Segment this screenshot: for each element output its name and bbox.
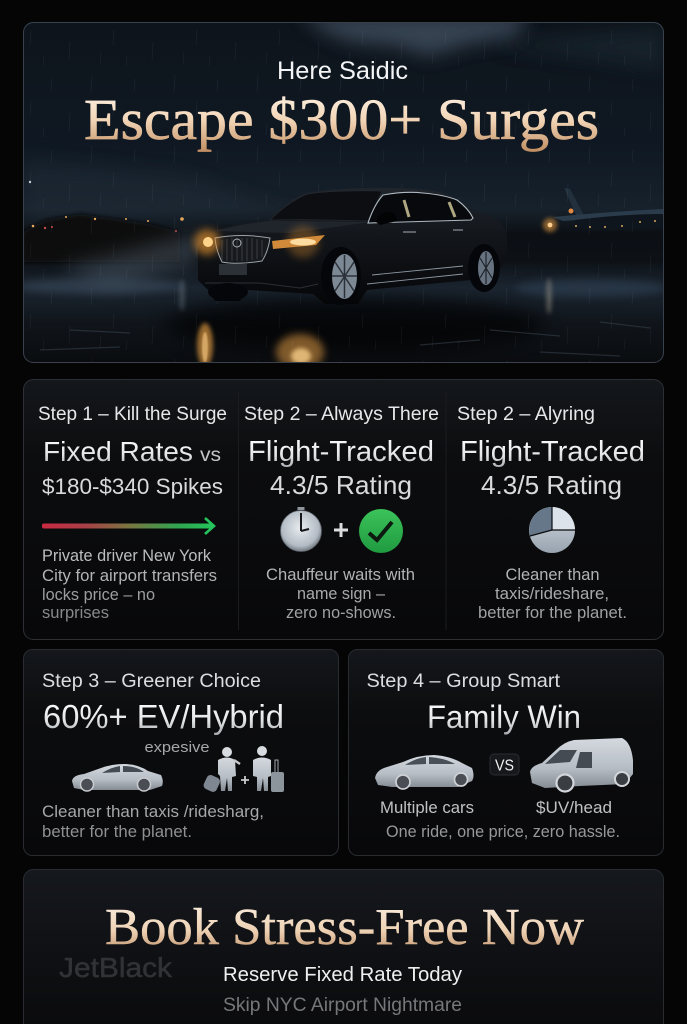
column: kill the surge: Private driver New York — [42, 547, 212, 565]
icon: van — [530, 738, 633, 792]
panel: step 3 — [24, 650, 338, 856]
plane — [543, 188, 663, 232]
label: per head: $UV/head — [536, 798, 612, 817]
step 4 description: One ride, one price, zero hassle. — [386, 822, 620, 841]
panel: step 4 — [348, 650, 664, 856]
column: kill the surge: surprises — [42, 604, 109, 622]
step 3 heading: Step 3 – Greener Choice — [42, 670, 261, 692]
icon: silver sedan — [72, 764, 163, 791]
column: alyring: Flight-Tracked — [460, 436, 645, 468]
hero title: Escape $300+ Surges — [84, 87, 599, 152]
step 3 description: better for the planet. — [42, 822, 192, 841]
vs badge — [490, 754, 519, 775]
column: kill the surge — [38, 403, 227, 622]
column: always there: zero no-shows. — [286, 604, 396, 622]
column: alyring: taxis/rideshare, — [495, 585, 609, 603]
headlights — [194, 226, 325, 258]
hero kicker: Here Saidic — [277, 57, 408, 85]
panel: call to action — [24, 870, 664, 1024]
icon: sedan — [375, 755, 474, 789]
column: kill the surge: Step 1 – Kill the Surge — [38, 403, 227, 425]
step 3 description — [42, 802, 264, 841]
column: always there: Chauffeur waits with — [266, 566, 415, 584]
column: alyring: better for the planet. — [478, 604, 627, 622]
wheels — [208, 244, 500, 305]
column: always there: name sign – — [297, 585, 386, 603]
icon: green check — [359, 509, 403, 553]
column: alyring — [457, 403, 645, 622]
column: always there: Step 2 – Always There — [244, 403, 439, 425]
step 3 stat: 60%+ EV/Hybrid — [43, 698, 284, 735]
panel: steps 1 and 2 — [24, 380, 664, 640]
column: kill the surge: vs — [200, 445, 221, 466]
horizon lights — [23, 181, 184, 262]
icon: plus — [334, 523, 348, 537]
step 4 stat: Family Win — [427, 699, 581, 735]
cta subtitle: Reserve Fixed Rate Today — [223, 964, 462, 986]
panel: hero — [15, 15, 665, 370]
column: kill the surge: $180-$340 Spikes — [42, 474, 223, 499]
brand watermark: JetBlack — [59, 952, 173, 983]
wet tarmac — [15, 232, 665, 370]
label: multiple cars: Multiple cars — [380, 798, 474, 817]
column: always there: Flight-Tracked — [248, 436, 434, 468]
column: kill the surge: Fixed Rates — [43, 436, 193, 467]
column: always there — [244, 403, 439, 622]
vs badge: VS — [495, 758, 514, 774]
column: always there: 4.3/5 Rating — [270, 470, 412, 500]
step 3 description: Cleaner than taxis /ridesharg, — [42, 802, 264, 821]
icon: black car — [194, 188, 507, 305]
arrow: price gradient — [42, 518, 214, 534]
front grille — [215, 236, 270, 263]
column: alyring: Cleaner than — [506, 566, 600, 584]
column: alyring: 4.3/5 Rating — [481, 470, 622, 500]
cta title: Book Stress-Free Now — [105, 899, 584, 956]
icon: pie chart — [529, 507, 575, 553]
icon: clock — [280, 507, 322, 552]
icon: travellers with luggage — [202, 746, 284, 793]
small label: expesive — [144, 739, 210, 756]
column: kill the surge: City for airport transfers — [42, 567, 217, 585]
cta tagline: Skip NYC Airport Nightmare — [223, 995, 462, 1016]
column: kill the surge: locks price – no — [42, 586, 155, 604]
step 4 heading: Step 4 – Group Smart — [366, 670, 561, 692]
column: alyring: Step 2 – Alyring — [457, 403, 595, 425]
